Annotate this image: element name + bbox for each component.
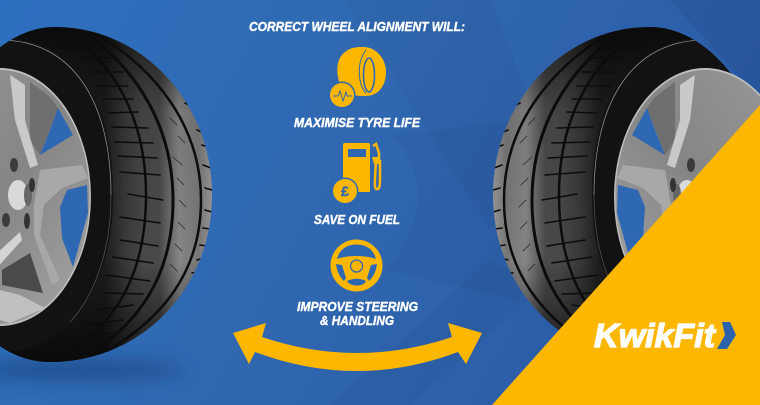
heading: CORRECT WHEEL ALIGNMENT WILL: [249, 19, 465, 34]
icon: fuel pump with pound coin: £ [341, 183, 349, 199]
Kwik Fit logo: KwikFit [594, 317, 717, 354]
icon: tyre with pulse [328, 47, 386, 108]
double-headed arrow [233, 323, 482, 371]
icon: steering wheel [330, 240, 382, 292]
label: improve steering and handling: IMPROVE STEERING [297, 299, 418, 314]
yellow corner panel [492, 105, 760, 405]
right tyre [493, 27, 760, 362]
label: improve steering and handling [297, 299, 418, 328]
label: save on fuel: SAVE ON FUEL [314, 212, 400, 227]
icon: fuel pump with pound coin [332, 143, 380, 204]
tyre shadow [0, 361, 185, 379]
left tyre [0, 27, 212, 362]
label: improve steering and handling: & HANDLING [320, 313, 394, 328]
label: maximise tyre life: MAXIMISE TYRE LIFE [294, 115, 420, 130]
